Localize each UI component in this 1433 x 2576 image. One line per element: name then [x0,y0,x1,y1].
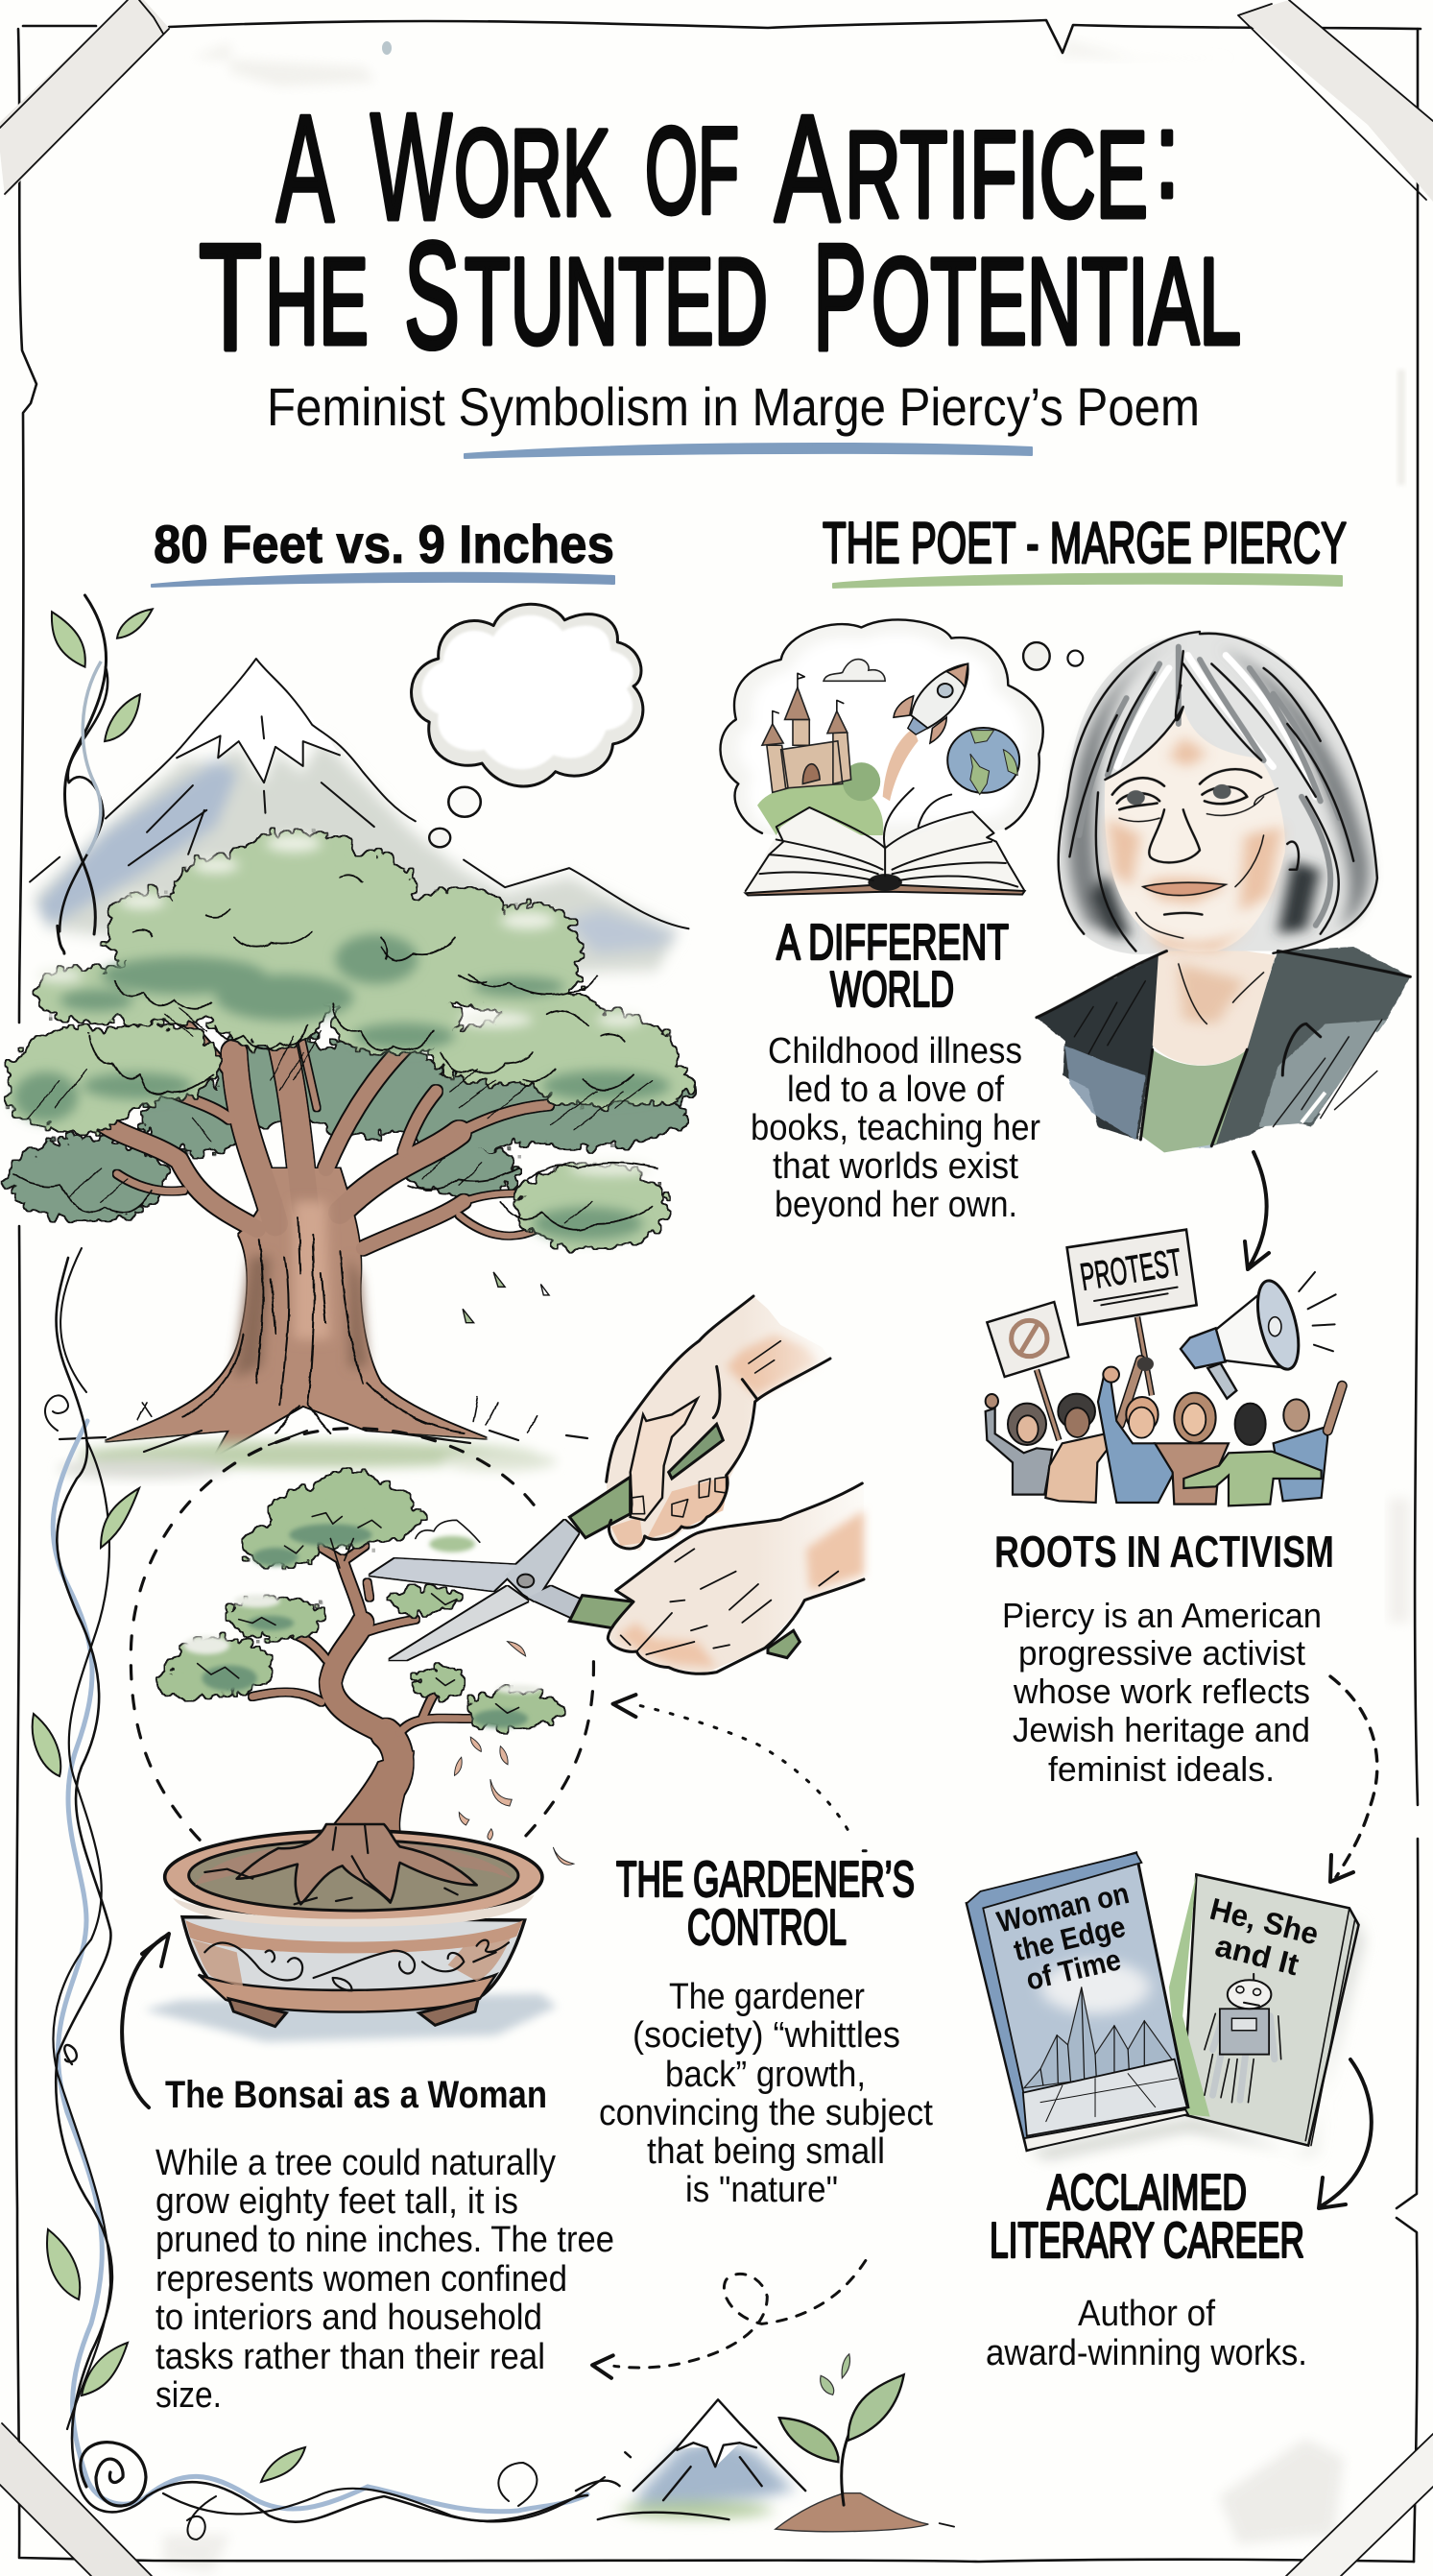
text: bonsai description: size. [155,2375,222,2416]
book: He, She and It [1169,1874,1359,2146]
text: gardener description: The gardener [669,1977,865,2017]
person five [1183,1452,1322,1505]
tree: trunk shading [234,1201,368,1378]
text: gardener description: (society) “whittles [633,2015,900,2056]
vine: top left [52,595,153,953]
tree: line work [13,875,657,1432]
title: T [199,213,262,382]
tree: falling leaves [463,1272,549,1323]
title: OF [645,103,739,240]
title: W [370,83,452,252]
title: A [775,84,840,253]
person one [986,1408,1053,1495]
text: gardener description: convincing the subject [599,2093,933,2133]
text: different world description: led to a love of [787,1070,1004,1110]
cloud small [824,660,885,681]
dashed circle around bonsai [131,1429,593,1845]
book title: He, She and It: and It [1212,1928,1302,1982]
text: career description: award-winning works. [986,2333,1307,2373]
person four [1155,1443,1229,1505]
text: different world description [751,1031,1040,1225]
heading: roots in activism: ROOTS IN ACTIVISM [994,1527,1334,1577]
illustration: sprout [776,2354,954,2532]
title [199,83,1241,382]
arrow: gardener to bonsai [613,1695,872,1851]
title: RTIFICE [845,107,1148,244]
shears: pivot [517,1575,534,1587]
person six [1274,1428,1327,1501]
illustration: empty thought cloud [412,604,643,847]
text: gardener description: that being small [647,2131,885,2172]
vine: left side and bottom border [33,1248,605,2540]
illustration: small mountain [576,2399,805,2519]
shears: blades [370,1520,583,1660]
title: A [276,84,334,253]
rocket [883,728,919,801]
title: P [813,213,867,382]
arrow: books to career [1319,2059,1372,2208]
heading: bonsai as a woman: The Bonsai as a Woman [165,2074,547,2116]
arrow: dashed curve to books [1330,1676,1377,1882]
heading: 80 feet vs 9 inches: 80 Feet vs. 9 Inches [154,514,614,574]
text: activism description [1002,1596,1322,1789]
sign: protest [1067,1230,1197,1325]
arrow: portrait to protest [1245,1152,1269,1269]
text: activism description: Piercy is an American [1002,1596,1322,1635]
corner tape: top right [1238,0,1433,202]
upper hand [569,1296,830,1551]
person three arm [1120,1360,1140,1424]
bonsai: foliage [158,1471,561,1728]
bonsai: falling clippings [455,1642,574,1865]
text: gardener description: back” growth, [665,2055,866,2095]
book title: Woman on the Edge of Time: the Edge [1011,1910,1129,1967]
heading: acclaimed literary career [990,2165,1304,2269]
title: HE [265,233,369,371]
illustration: open book with imagined worlds [720,619,1083,895]
heading: a different world [776,915,1009,1018]
title: S [404,211,460,380]
text: different world description: that worlds exist [773,1146,1018,1187]
portrait: jacket [1037,947,1410,1148]
text: activism description: feminist ideals. [1048,1749,1275,1789]
open book [746,807,1025,891]
book title: Woman on the Edge of Time: Woman on [993,1876,1133,1939]
text: gardener description [599,1977,933,2210]
bonsai: foliage shading [183,1524,541,1728]
text: bonsai description: to interiors and household [155,2298,542,2338]
text: bonsai description: While a tree could naturally [155,2143,556,2183]
text: different world description: books, teaching her [751,1108,1040,1148]
bonsai pot [144,1824,557,2042]
book title: Woman on the Edge of Time: of Time [1023,1942,1124,1997]
illustration: portrait of Marge Piercy [1037,632,1410,1152]
heading: a different world: WORLD [830,962,954,1018]
illustration: hands with pruning shears [370,1296,864,1673]
subtitle [267,376,1200,458]
heading: a different world: A DIFFERENT [776,915,1009,971]
text: bonsai description: represents women confined [155,2259,567,2299]
portrait: fringe and hair strands [1079,647,1339,926]
text: activism description: progressive activist [1018,1633,1305,1673]
lower hand and handle [569,1483,864,1673]
text: different world description: beyond her own. [775,1185,1017,1225]
text: bonsai description [155,2143,614,2416]
tree: back foliage [10,1025,693,1220]
text: different world description: Childhood illness [768,1031,1022,1071]
text: career description: Author of [1078,2294,1215,2334]
heading: gardener's control: CONTROL [687,1900,847,1956]
arrow: dashed looping arrow [592,2260,866,2378]
text: bonsai description: grow eighty feet tall, it is [155,2181,518,2222]
illustration: mountains [30,659,688,975]
book title: Woman on the Edge of Time [993,1876,1133,1997]
title: ORK [454,105,610,242]
text: activism description: Jewish heritage and [1013,1710,1310,1749]
illustration: protest crowd with signs and megaphone [986,1230,1342,1505]
book: Woman on the Edge of Time [967,1853,1188,2151]
tree: watercolor foliage washes [13,834,670,1240]
illustration: tall eighty-foot tree [10,832,693,1479]
title: TUNTED [465,233,768,371]
corner tape: bottom right [1286,2434,1433,2576]
portrait: neck [1153,938,1276,1065]
book title: He, She and It: He, She [1206,1891,1322,1951]
castle [757,782,883,835]
portrait: hair [1060,632,1377,954]
illustration: bonsai tree [144,1471,574,2042]
book title: He, She and It [1206,1891,1322,1982]
subtitle: Feminist Symbolism in Marge Piercy’s Poem [267,376,1200,437]
portrait: shirt [1140,1049,1247,1152]
text: bonsai description: tasks rather than their real [155,2337,545,2377]
text: activism description: whose work reflects [1013,1672,1310,1711]
corner tape: top left [0,0,169,197]
portrait: facial features [1112,769,1278,1023]
tree: front foliage [10,832,691,1248]
corner tape: bottom left [0,2423,152,2576]
text: career description [986,2294,1307,2373]
globe [947,728,1019,793]
person three [1098,1376,1174,1503]
text: gardener description: is "nature" [685,2170,838,2210]
megaphone [1216,1294,1288,1368]
thought cloud [720,619,1043,853]
ground line work [60,1431,587,1452]
sign: prohibition [987,1302,1068,1377]
arrow: text to pot [122,1934,169,2107]
illustration: two novels [967,1853,1363,2160]
title: : [1155,86,1180,224]
person two [1045,1433,1107,1503]
robot [1212,2016,1275,2100]
heading: gardener's control [616,1852,915,1956]
portrait: jacket strokes [1037,951,1410,1146]
protest sign text: PROTEST [1078,1241,1184,1299]
heading: gardener's control: THE GARDENER’S [616,1852,915,1908]
bonsai: foliage line work [198,1513,518,1713]
heading: acclaimed literary career: ACCLAIMED [1047,2165,1247,2221]
tree: grassy ground [58,1441,557,1479]
portrait: face [1105,707,1285,951]
bonsai: trunk [252,1546,473,1847]
tree: trunk and branches [94,953,549,1455]
text: bonsai description: pruned to nine inches. The tree [155,2220,614,2260]
